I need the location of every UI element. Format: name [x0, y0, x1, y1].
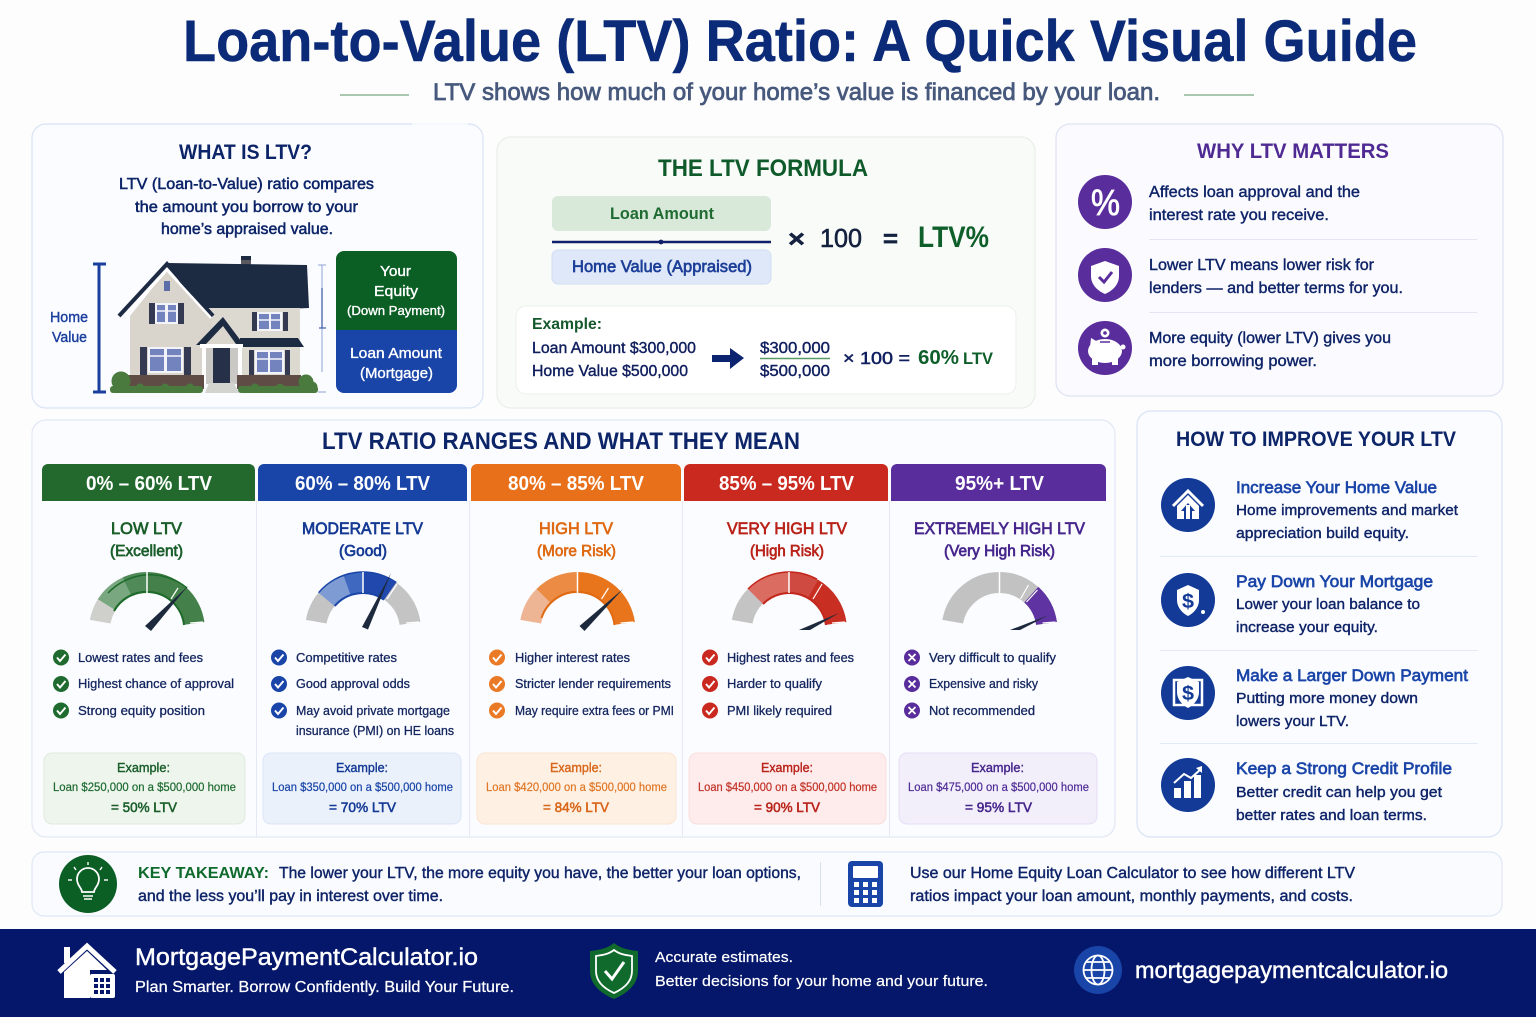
fraction bar	[552, 240, 771, 244]
icon: percent: %	[1091, 182, 1120, 223]
bullets: very high: Harder to qualify	[727, 676, 822, 691]
icon: calculator	[848, 861, 883, 907]
bullets: very high: PMI likely required	[727, 703, 832, 718]
example: high: Example:	[550, 760, 602, 775]
label: extremely high: (Very High Risk)	[944, 543, 1055, 560]
example: extremely high	[899, 753, 1097, 824]
example: moderate: Loan $350,000 on a $500,000 home	[272, 782, 453, 794]
label: moderate	[302, 520, 423, 560]
header: 95+: 95%+ LTV	[955, 473, 1045, 495]
header: 60-80: 60% – 80% LTV	[295, 473, 431, 495]
icon: banknote: $	[1182, 683, 1194, 705]
improve text: Better credit can help you get	[1236, 784, 1443, 801]
improve text: increase your equity.	[1236, 619, 1378, 636]
formula multiplier	[788, 223, 898, 253]
improve text: Home improvements and market	[1236, 502, 1459, 519]
accuracy text	[655, 949, 988, 990]
key takeaway text: The lower your LTV, the more equity you have, the better your loan options,	[279, 865, 801, 882]
bullets: high	[489, 650, 674, 718]
improve text: Keep a Strong Credit Profile	[1236, 760, 1452, 778]
calculator text	[910, 865, 1356, 905]
gauge: high	[531, 572, 634, 625]
loan block: Loan Amount	[350, 346, 442, 362]
improve text: Lower your loan balance to	[1236, 596, 1420, 613]
header: 0-60	[42, 464, 255, 501]
heading: formula: THE LTV FORMULA	[658, 155, 868, 182]
label: very high: (High Risk)	[750, 543, 824, 560]
header: 80-85	[471, 464, 681, 501]
example: very high	[689, 753, 886, 824]
column: extremely high LTV	[891, 464, 1106, 824]
bullets: low: Highest chance of approval	[78, 676, 234, 691]
accuracy text: Accurate estimates.	[655, 949, 793, 966]
key takeaway text: KEY TAKEAWAY:	[138, 865, 269, 882]
example box: Example:	[532, 316, 602, 333]
label: extremely high: EXTREMELY HIGH LTV	[914, 520, 1085, 538]
example: moderate	[263, 753, 461, 824]
example: extremely high: Example:	[971, 760, 1024, 775]
heading: why: WHY LTV MATTERS	[1197, 139, 1389, 163]
why text	[1149, 184, 1403, 370]
key takeaway text: and the less you’ll pay in interest over time.	[138, 888, 443, 905]
column: low LTV	[42, 464, 255, 824]
improve text: Make a Larger Down Payment	[1236, 667, 1468, 685]
bullets: extremely high: Not recommended	[929, 703, 1035, 718]
example box: × 100 =	[843, 348, 910, 368]
icon: house illustration	[110, 256, 318, 393]
label: high: (More Risk)	[537, 543, 616, 560]
loan block	[336, 330, 457, 393]
definition text: home’s appraised value.	[161, 221, 333, 238]
why text: Affects loan approval and the	[1149, 184, 1360, 201]
bullets: extremely high: Very difficult to qualify	[929, 650, 1056, 665]
arrow	[712, 348, 744, 369]
numerator: Loan Amount	[610, 205, 714, 223]
example box: LTV	[963, 350, 993, 368]
label: high	[537, 520, 616, 560]
equity block: Your	[380, 264, 411, 280]
why text: interest rate you receive.	[1149, 207, 1329, 224]
bullets: low: Lowest rates and fees	[78, 650, 203, 665]
bushes	[110, 372, 318, 393]
website: mortgagepaymentcalculator.io	[1135, 957, 1448, 983]
label: low: (Excellent)	[110, 543, 183, 560]
column: moderate LTV	[258, 464, 467, 824]
icon: house arrow	[1161, 478, 1215, 532]
improve text	[1236, 479, 1468, 824]
accuracy text: Better decisions for your home and your future.	[655, 973, 988, 990]
bullets: low: Strong equity position	[78, 703, 205, 718]
example box: $300,000	[760, 340, 830, 357]
example: low: Loan $250,000 on a $500,000 home	[53, 782, 236, 794]
bullets: moderate: Good approval odds	[296, 676, 410, 691]
example: low: = 50% LTV	[111, 799, 178, 815]
panel: how to improve	[1137, 411, 1502, 837]
label: moderate: MODERATE LTV	[302, 520, 423, 538]
equity block: (Down Payment)	[347, 303, 445, 318]
definition text: LTV (Loan-to-Value) ratio compares	[119, 176, 374, 193]
tagline: Plan Smarter. Borrow Confidently. Build Your Future.	[135, 979, 514, 996]
calculator text: ratios impact your loan amount, monthly payments, and costs.	[910, 888, 1353, 905]
numerator	[552, 196, 771, 231]
calculator text: Use our Home Equity Loan Calculator to see how different LTV	[910, 865, 1356, 882]
example: high: Loan $420,000 on a $500,000 home	[486, 782, 667, 794]
example: high: = 84% LTV	[543, 799, 610, 815]
loan block: (Mortgage)	[360, 366, 433, 382]
label: moderate: (Good)	[339, 543, 387, 560]
bullets: very high	[702, 650, 854, 718]
example: very high: Example:	[761, 760, 813, 775]
title: Loan-to-Value (LTV) Ratio: A Quick Visual Guide	[183, 9, 1417, 74]
home value label	[50, 310, 88, 346]
panel: LTV formula	[497, 137, 1035, 408]
key takeaway text	[138, 865, 801, 905]
bullets: moderate	[271, 650, 454, 738]
example box: 60%	[918, 347, 959, 369]
column: very high LTV	[684, 464, 888, 824]
home value label: Home	[50, 310, 88, 326]
bullets: low	[53, 650, 234, 718]
label: very high: VERY HIGH LTV	[727, 520, 847, 538]
panel: key takeaway	[32, 852, 1502, 916]
header: 85-95: 85% – 95% LTV	[719, 473, 855, 495]
icon: growth chart	[1161, 758, 1215, 812]
brand name: MortgagePaymentCalculator.io	[135, 944, 478, 971]
icon: dollar	[1161, 573, 1215, 627]
improve text: appreciation build equity.	[1236, 525, 1409, 542]
why text: more borrowing power.	[1149, 353, 1317, 370]
example: very high: Loan $450,000 on a $500,000 home	[698, 782, 877, 794]
gauge: low	[100, 572, 203, 625]
bullets: high: Higher interest rates	[515, 650, 630, 665]
equity block: Equity	[374, 284, 419, 300]
denominator: Home Value (Appraised)	[572, 258, 752, 276]
bullets: extremely high: Expensive and risky	[929, 676, 1038, 691]
heading: what is LTV: WHAT IS LTV?	[179, 141, 312, 164]
improve text: better rates and loan terms.	[1236, 807, 1427, 824]
bullets: moderate: insurance (PMI) on HE loans	[296, 723, 454, 738]
formula multiplier: ×	[788, 226, 805, 253]
column: high LTV	[471, 464, 681, 824]
example: very high: = 90% LTV	[754, 799, 821, 815]
panel: LTV ranges	[32, 420, 1115, 837]
example: extremely high: Loan $475,000 on a $500,000 home	[908, 782, 1089, 794]
label: very high	[727, 520, 847, 560]
header: 95+	[891, 464, 1106, 501]
bullets: extremely high	[904, 650, 1056, 718]
example: low: Example:	[117, 760, 170, 775]
improve text: Putting more money down	[1236, 690, 1418, 707]
label: extremely high	[914, 520, 1085, 560]
icon: globe	[1074, 946, 1122, 994]
label: low	[110, 520, 183, 560]
example: high	[477, 753, 676, 824]
header: 80-85: 80% – 85% LTV	[508, 473, 645, 495]
label: high: HIGH LTV	[539, 520, 613, 538]
denominator	[552, 250, 771, 284]
example: moderate: = 70% LTV	[329, 799, 397, 815]
icon: percent	[1078, 175, 1132, 229]
panel: what is LTV	[32, 124, 483, 408]
bullets: high: May require extra fees or PMI	[515, 703, 674, 718]
icon: piggy bank	[1078, 321, 1132, 375]
why text: More equity (lower LTV) gives you	[1149, 330, 1391, 347]
equity bracket	[318, 265, 326, 392]
icon: light bulb	[59, 855, 117, 913]
icon: dollar: $	[1182, 591, 1194, 613]
definition text: the amount you borrow to your	[135, 199, 358, 216]
why text: Lower LTV means lower risk for	[1149, 257, 1374, 274]
bullets: moderate: Competitive rates	[296, 650, 397, 665]
icon: footer shield	[590, 943, 638, 999]
example box: Home Value $500,000	[532, 363, 688, 380]
gauge: extremely high	[953, 572, 1056, 623]
bullets: high: Stricter lender requirements	[515, 676, 671, 691]
improve text: Pay Down Your Mortgage	[1236, 573, 1433, 591]
icon: banknote	[1161, 666, 1215, 720]
heading: improve: HOW TO IMPROVE YOUR LTV	[1176, 427, 1457, 451]
bullets: moderate: May avoid private mortgage	[296, 703, 450, 718]
panel: why LTV matters	[1056, 124, 1503, 396]
header: 85-95	[684, 464, 888, 501]
windows	[140, 281, 290, 377]
home value bracket	[93, 264, 106, 392]
example box: $500,000	[760, 363, 830, 380]
subtitle: LTV shows how much of your home’s value is financed by your loan.	[433, 79, 1160, 106]
example box: Loan Amount $300,000	[532, 340, 696, 357]
why text: lenders — and better terms for you.	[1149, 280, 1403, 297]
icon: shield	[1078, 248, 1132, 302]
improve text: lowers your LTV.	[1236, 713, 1349, 730]
example: moderate: Example:	[336, 760, 388, 775]
definition text	[119, 176, 374, 238]
gauge: moderate	[316, 572, 419, 623]
bullets: very high: Highest rates and fees	[727, 650, 854, 665]
formula multiplier: 100	[820, 223, 862, 253]
formula multiplier: =	[883, 226, 898, 253]
icon: footer house	[59, 946, 115, 998]
example: low	[44, 753, 245, 824]
example: extremely high: = 95% LTV	[965, 799, 1033, 815]
header: 0-60: 0% – 60% LTV	[86, 473, 213, 495]
home value label: Value	[52, 330, 87, 346]
gauge: very high	[742, 572, 845, 625]
improve text: Increase Your Home Value	[1236, 479, 1437, 497]
heading: ranges: LTV RATIO RANGES AND WHAT THEY MEAN	[322, 428, 800, 455]
header: 60-80	[258, 464, 467, 501]
example box	[516, 306, 1016, 394]
formula result: LTV%	[918, 221, 989, 254]
label: low: LOW LTV	[111, 520, 182, 538]
equity block	[336, 251, 457, 330]
footer	[0, 929, 1536, 1017]
